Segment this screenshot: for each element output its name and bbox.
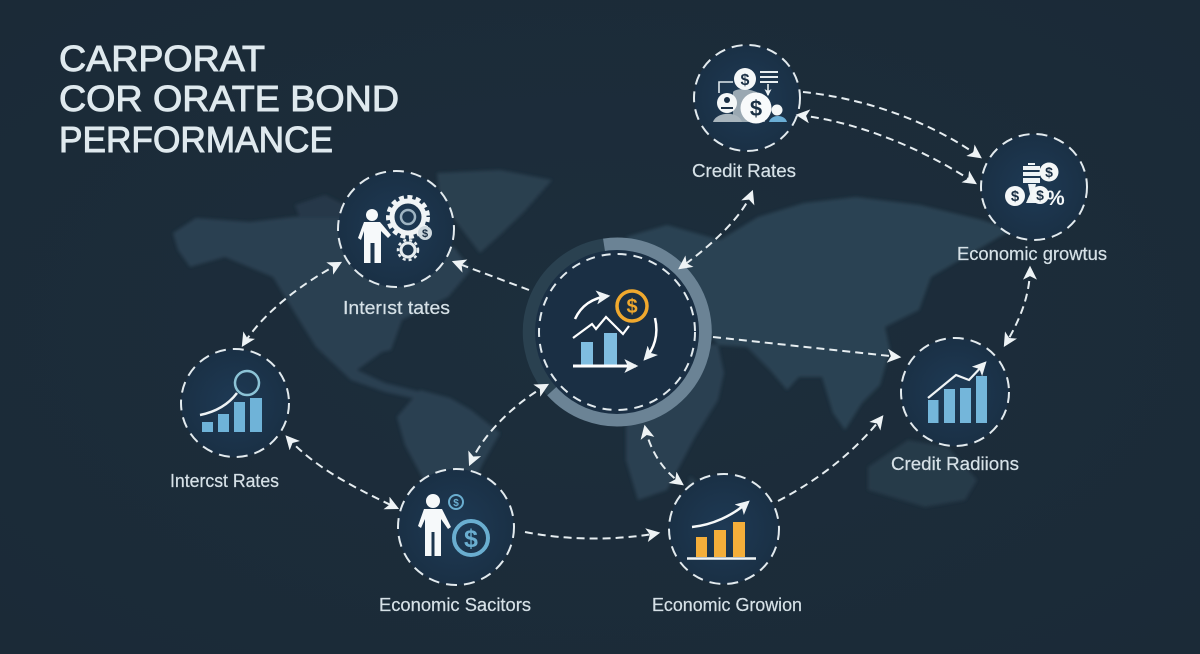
icon: coin stack and percent: $	[1011, 188, 1020, 205]
icon: person and gears: $	[422, 228, 428, 240]
node: Credit Rates	[692, 45, 800, 181]
node: Economic Sacitors	[379, 469, 531, 615]
node: Interest tates	[338, 171, 454, 318]
icon: coins and people: $	[750, 96, 762, 121]
icon: person and dollar coins: $	[464, 525, 478, 553]
node: Interest Rates	[170, 349, 289, 491]
node: Economic growtus	[957, 134, 1107, 264]
icon: bars and coin	[573, 291, 656, 366]
icon: orange bars and arrow	[687, 502, 756, 558]
title: COR ORATE BOND	[59, 78, 399, 119]
arrows	[243, 92, 1030, 539]
label: Credit Radiions	[891, 454, 1019, 474]
icon: bars and coin: $	[626, 296, 638, 318]
icon: coins and people	[713, 68, 787, 124]
node: Credit Radiions	[891, 338, 1019, 474]
icon: coin stack and percent: $	[1045, 164, 1053, 180]
label: Economic growtus	[957, 244, 1107, 264]
icon: person and dollar coins: $	[453, 498, 459, 509]
world map	[173, 170, 1011, 510]
icon: coin stack and percent	[1005, 162, 1065, 210]
icon: magnifier and bars	[200, 371, 262, 432]
title: PERFORMANCE	[59, 119, 333, 160]
label: Interıst tates	[343, 298, 450, 318]
central node	[529, 244, 705, 420]
label: Economic Sacitors	[379, 595, 531, 615]
icon: coin stack and percent: $	[1036, 187, 1044, 203]
node: Economic Growion	[652, 474, 802, 615]
icon: coins and people: $	[741, 72, 750, 89]
icon: blue bars and line	[928, 363, 987, 423]
title: CARPORAT	[59, 38, 265, 79]
icon: person and dollar coins	[418, 494, 488, 556]
title	[59, 38, 399, 160]
label: Economic Growion	[652, 595, 802, 615]
icon: person and gears	[358, 197, 432, 263]
label: Credit Rates	[692, 161, 796, 181]
icon: coin stack and percent: %	[1046, 187, 1065, 210]
label: Intercst Rates	[170, 471, 279, 491]
